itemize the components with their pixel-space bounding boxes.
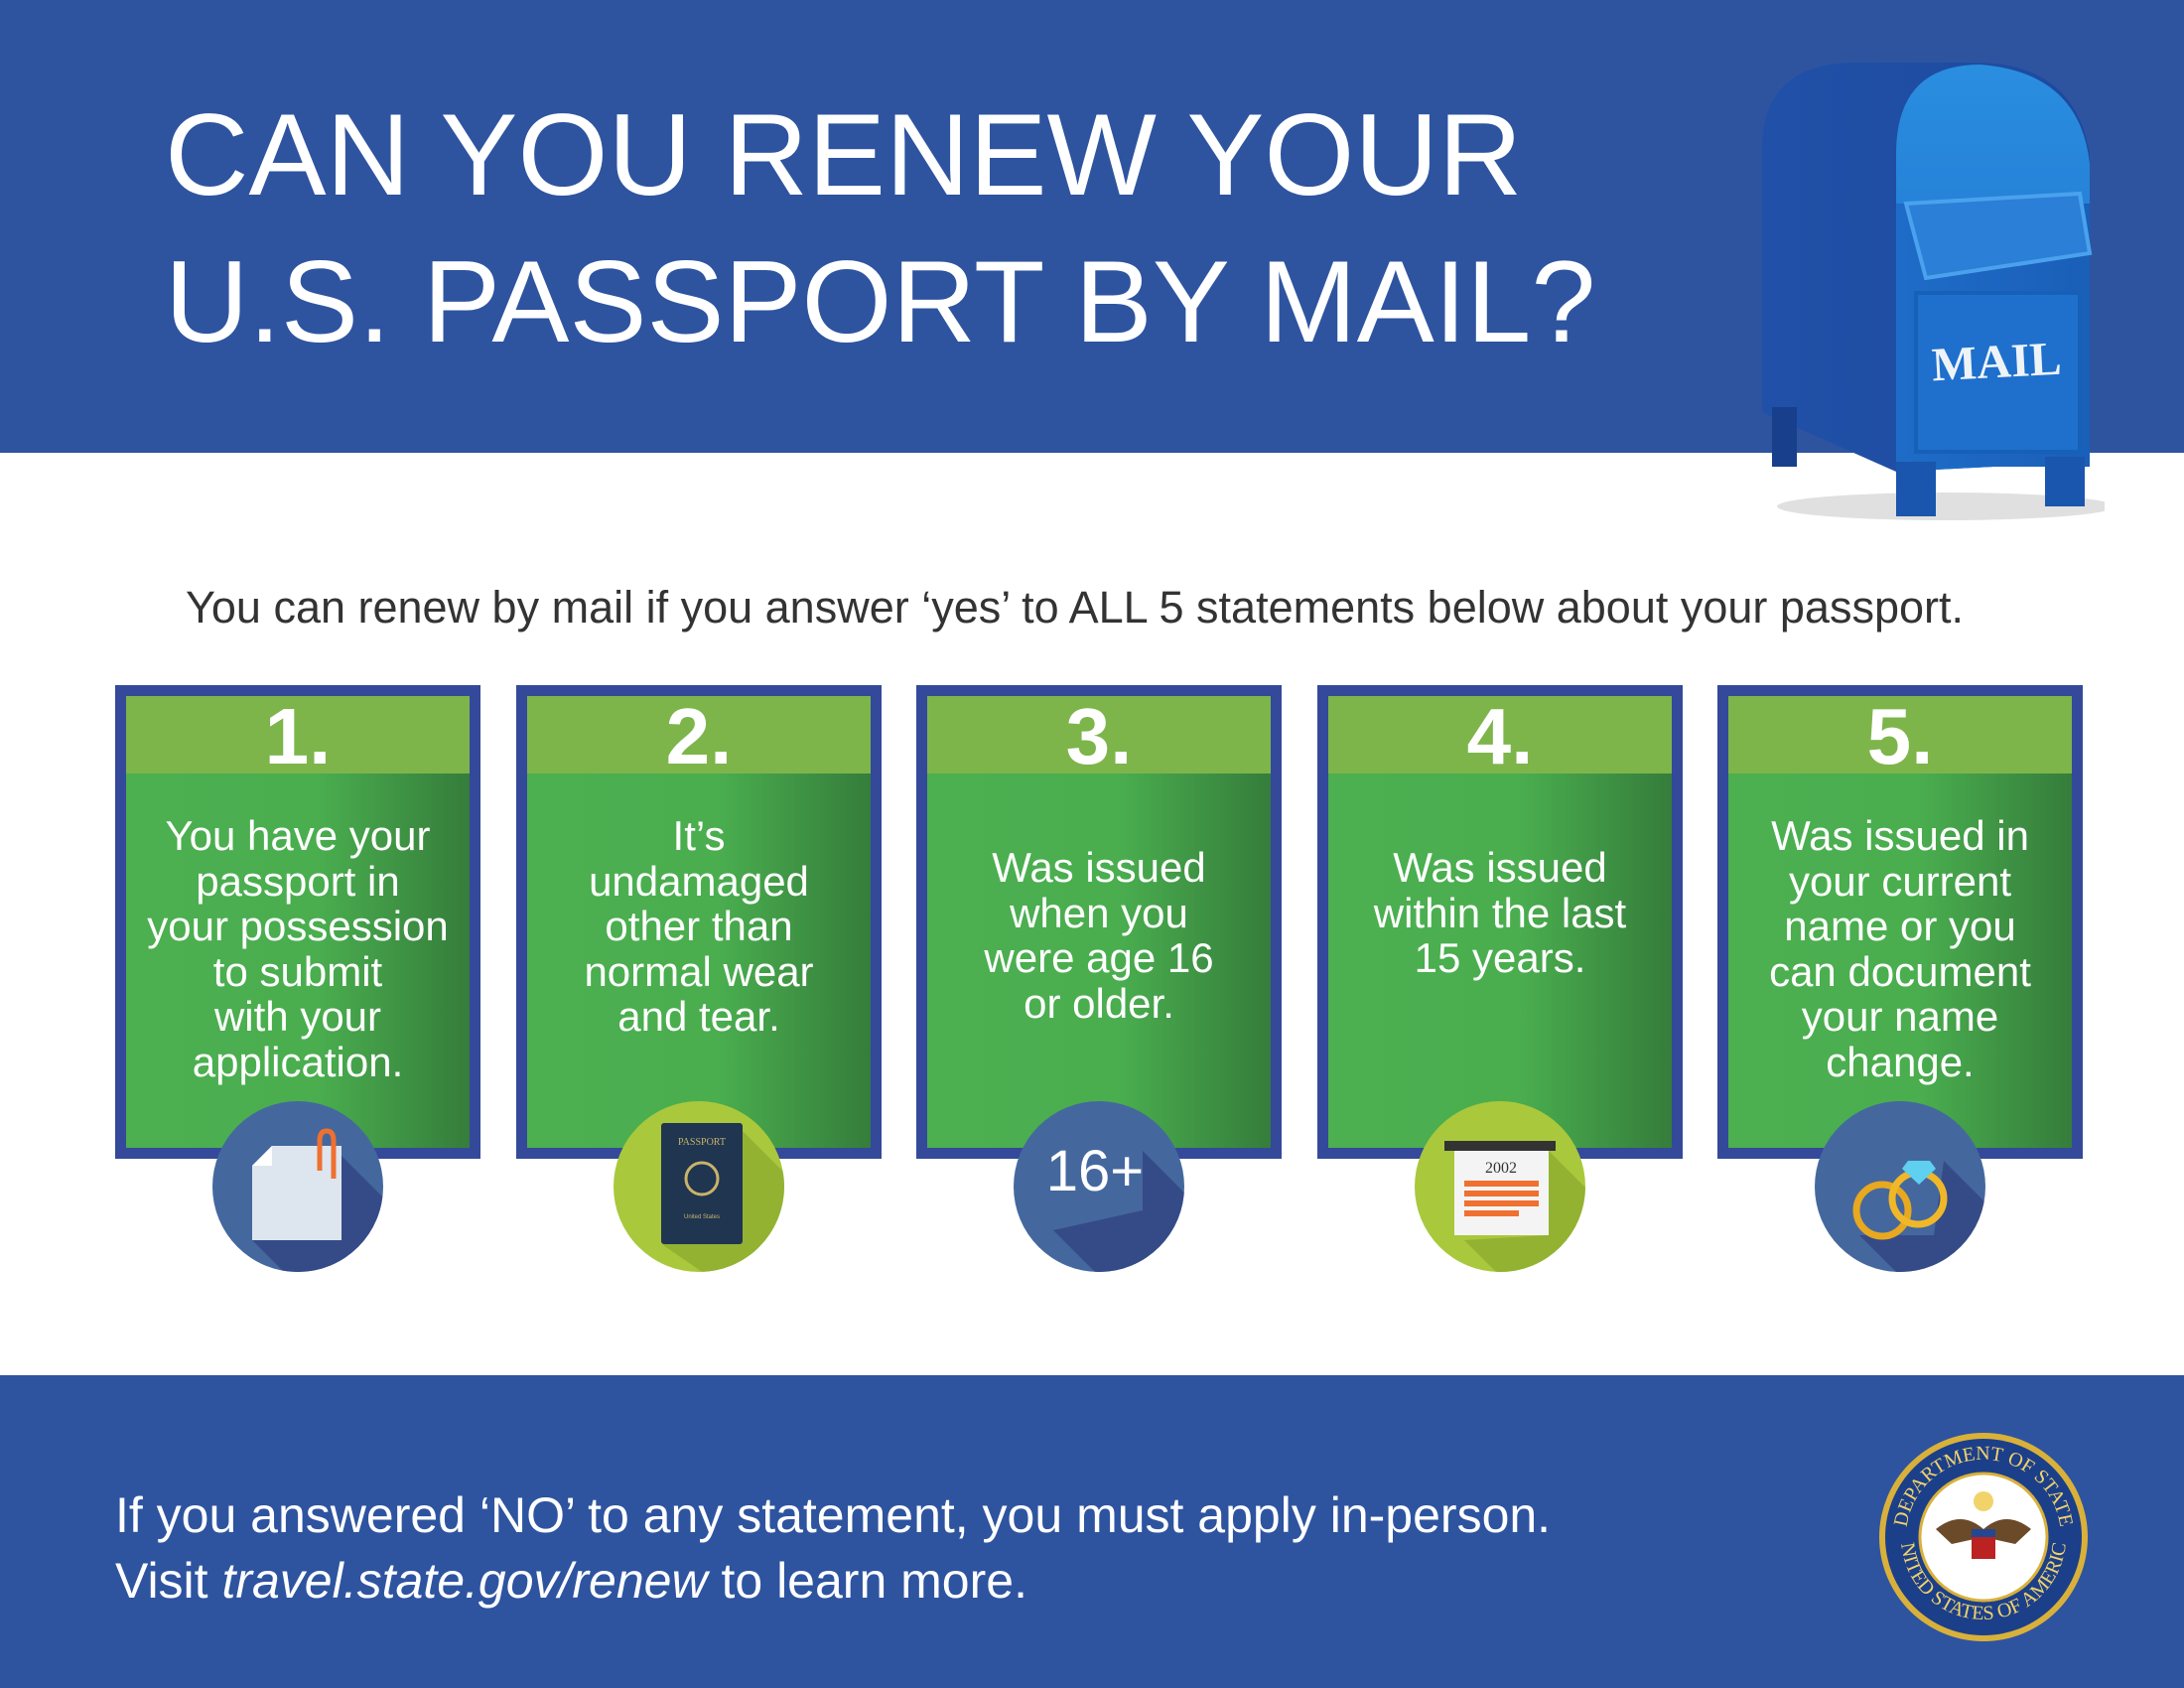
header band bbox=[0, 0, 2184, 453]
subtitle: You can renew by mail if you answer ‘yes’ to ALL 5 statements below about your passport. bbox=[186, 582, 1964, 633]
icon: 16+ bbox=[1014, 1101, 1184, 1272]
card 5: can document bbox=[1769, 947, 2031, 995]
card 5 bbox=[1717, 685, 2083, 1159]
card 3: were age 16 bbox=[984, 934, 1214, 981]
card 4: 4. bbox=[1467, 692, 1533, 780]
card 2: normal wear bbox=[584, 947, 814, 995]
card 3: or older. bbox=[1024, 979, 1174, 1027]
icon: calendar 2002: 2002 bbox=[1485, 1160, 1517, 1177]
card 4: Was issued bbox=[1393, 844, 1607, 891]
icon: mailbox bbox=[1762, 63, 2105, 520]
card 1: 1. bbox=[265, 692, 331, 780]
footer text: If you answered ‘NO’ to any statement, you must apply in-person. bbox=[115, 1487, 1551, 1543]
card 3: 3. bbox=[1066, 692, 1132, 780]
icon: document with paperclip bbox=[212, 1101, 383, 1272]
card 2: 2. bbox=[666, 692, 732, 780]
icon: wedding rings bbox=[1815, 1101, 1985, 1272]
title: CAN YOU RENEW YOUR bbox=[165, 89, 1522, 219]
icon: passport: United States bbox=[684, 1214, 720, 1220]
icon: mailbox: MAIL bbox=[1931, 333, 2063, 391]
card 2: other than bbox=[605, 903, 793, 949]
card 2: It’s bbox=[673, 812, 725, 859]
card 1: to submit bbox=[213, 947, 382, 995]
card 1: application. bbox=[193, 1039, 403, 1084]
card 3: when you bbox=[1010, 890, 1188, 935]
card 5: change. bbox=[1826, 1039, 1975, 1084]
card 2: undamaged bbox=[589, 858, 809, 904]
card 5: your name bbox=[1802, 993, 1998, 1040]
card 5: your current bbox=[1789, 858, 2011, 904]
seal: Department of State: DEPARTMENT OF STATE bbox=[1894, 1446, 2073, 1527]
card 3: Was issued bbox=[992, 844, 1206, 891]
title bbox=[165, 89, 1595, 366]
card 1 bbox=[115, 685, 480, 1159]
title: U.S. PASSPORT BY MAIL? bbox=[165, 236, 1595, 366]
card 1: passport in bbox=[196, 858, 400, 904]
card 2: and tear. bbox=[617, 993, 780, 1040]
icon: calendar 2002 bbox=[1415, 1101, 1585, 1272]
card 4: 15 years. bbox=[1415, 934, 1585, 981]
card 3 bbox=[916, 685, 1282, 1159]
card 4: within the last bbox=[1374, 890, 1626, 935]
icon: passport: PASSPORT bbox=[678, 1137, 726, 1148]
card 5: Was issued in bbox=[1771, 812, 2029, 859]
card 1: your possession bbox=[147, 903, 449, 949]
card 1: with your bbox=[214, 993, 381, 1040]
footer link text: Visit travel.state.gov/renew to learn more. bbox=[115, 1553, 1027, 1609]
footer band bbox=[0, 1375, 2184, 1688]
card 1: You have your bbox=[165, 812, 431, 859]
card 4 bbox=[1317, 685, 1683, 1159]
icon: passport bbox=[614, 1101, 784, 1272]
icon: 16+: 16+ bbox=[1046, 1139, 1144, 1203]
card 2 bbox=[516, 685, 882, 1159]
card 5: 5. bbox=[1867, 692, 1933, 780]
card 5: name or you bbox=[1784, 903, 2016, 949]
